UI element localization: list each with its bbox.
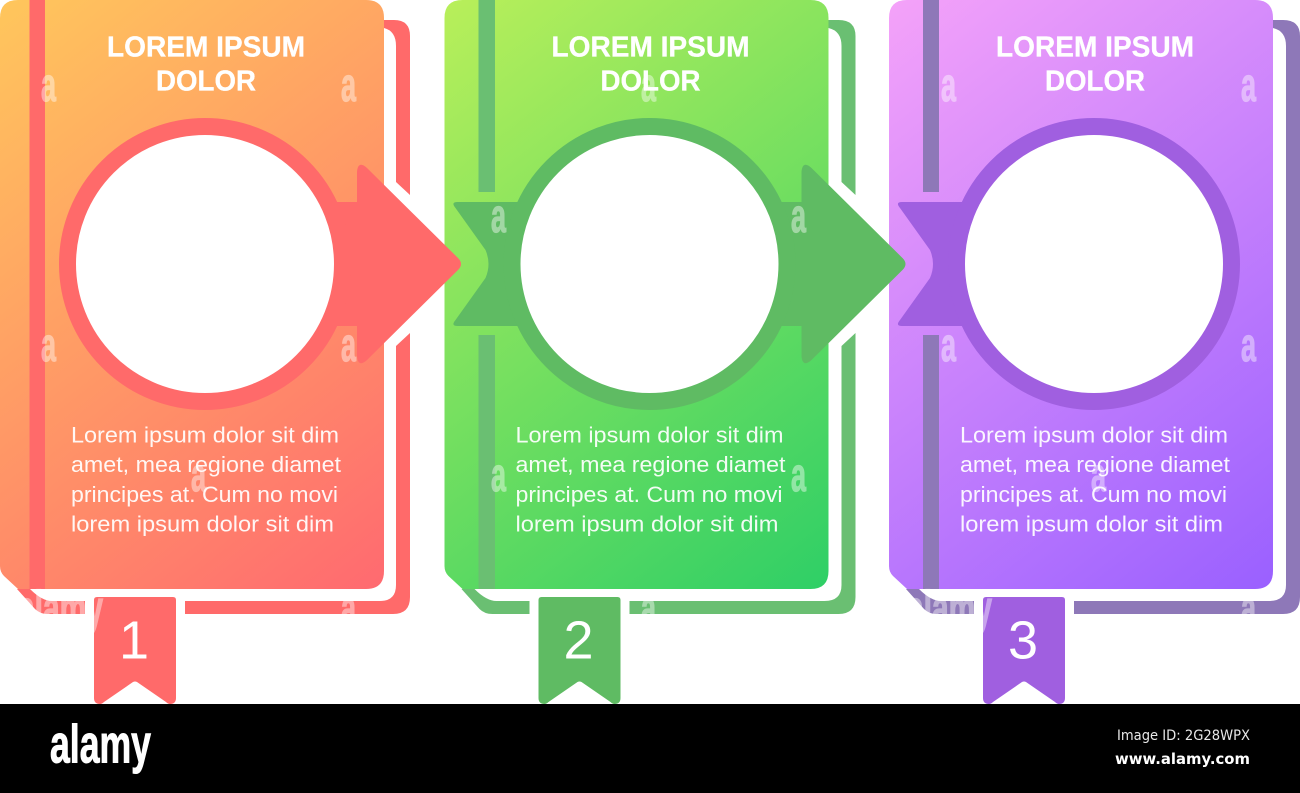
stock watermark marks: a bbox=[641, 58, 656, 111]
step body text: lorem ipsum dolor sit dim bbox=[71, 512, 334, 536]
step body text bbox=[71, 422, 341, 536]
step body text: principes at. Cum no movi bbox=[960, 482, 1227, 507]
stock watermark marks: a bbox=[1241, 58, 1256, 111]
left arrow notch bbox=[453, 202, 544, 326]
stock watermark marks: a bbox=[191, 448, 206, 501]
stock watermark marks: a bbox=[1091, 448, 1106, 501]
step body text: amet, mea regione diamet bbox=[960, 452, 1230, 477]
step body text: lorem ipsum dolor sit dim bbox=[516, 512, 778, 536]
stock watermark marks: alamy bbox=[18, 581, 103, 634]
step body text: amet, mea regione diamet bbox=[71, 452, 341, 477]
step body text bbox=[516, 422, 786, 536]
spine stripe bbox=[923, 0, 939, 589]
step body text: Lorem ipsum dolor sit dim bbox=[960, 422, 1228, 448]
left arrow notch bbox=[898, 202, 989, 326]
stock watermark marks: a bbox=[641, 581, 656, 634]
placeholder ring bbox=[68, 126, 342, 402]
bookmark number 2 bbox=[538, 597, 620, 704]
step heading: DOLOR bbox=[600, 66, 701, 98]
footer band bbox=[0, 704, 1300, 793]
stock watermark marks: a bbox=[41, 318, 56, 371]
stock watermark marks: a bbox=[791, 189, 806, 242]
book front cover bbox=[444, 0, 828, 589]
bookmark number 3: 3 bbox=[1008, 610, 1038, 670]
step heading: LOREM IPSUM bbox=[107, 32, 305, 64]
panel: step 1 bbox=[0, 0, 461, 704]
stock watermark marks: a bbox=[341, 318, 356, 371]
book back cover rails bbox=[906, 20, 1300, 614]
stock watermark marks: a bbox=[1241, 318, 1256, 371]
bookmark number 1: 1 bbox=[119, 610, 149, 670]
step heading: DOLOR bbox=[1045, 66, 1145, 98]
panel: step 2 bbox=[444, 0, 906, 704]
arrow out to next step bbox=[150, 165, 461, 363]
bookmark number 2: 2 bbox=[563, 610, 594, 670]
step body text: lorem ipsum dolor sit dim bbox=[960, 512, 1223, 536]
arrow out to next step bbox=[594, 165, 906, 363]
stock watermark marks bbox=[18, 58, 1256, 634]
website: www.alamy.com bbox=[1115, 750, 1250, 768]
placeholder ring bbox=[512, 126, 787, 402]
book back cover rails bbox=[17, 20, 410, 614]
panel: step 3 bbox=[889, 0, 1300, 704]
bookmark number 3 bbox=[983, 597, 1065, 704]
image id: Image ID: 2G28WPX bbox=[1117, 728, 1250, 744]
step body text: Lorem ipsum dolor sit dim bbox=[71, 422, 339, 448]
step heading: LOREM IPSUM bbox=[996, 32, 1194, 64]
step body text: Lorem ipsum dolor sit dim bbox=[516, 422, 784, 448]
spine stripe bbox=[30, 0, 45, 589]
stock watermark marks: a bbox=[341, 58, 356, 111]
stock watermark marks: a bbox=[341, 581, 356, 634]
spine stripe bbox=[478, 0, 495, 589]
placeholder ring bbox=[956, 126, 1232, 402]
step heading bbox=[996, 32, 1194, 98]
step heading: DOLOR bbox=[156, 66, 256, 98]
step heading: LOREM IPSUM bbox=[552, 32, 750, 64]
stock watermark marks: alamy bbox=[907, 581, 992, 634]
stock watermark marks: a bbox=[1241, 581, 1256, 634]
alamy logo: alamy bbox=[50, 714, 151, 774]
step body text: principes at. Cum no movi bbox=[71, 482, 338, 507]
book front cover bbox=[0, 0, 384, 589]
step heading bbox=[107, 32, 305, 98]
stock watermark marks: a bbox=[791, 448, 806, 501]
step heading bbox=[552, 32, 750, 98]
book back cover rails bbox=[462, 20, 856, 614]
book front cover bbox=[889, 0, 1273, 589]
stock watermark marks: a bbox=[491, 448, 506, 501]
stock watermark marks: a bbox=[941, 58, 956, 111]
stock watermark marks: a bbox=[41, 58, 56, 111]
bookmark number 1 bbox=[94, 597, 176, 704]
step body text bbox=[960, 422, 1230, 536]
step body text: amet, mea regione diamet bbox=[516, 452, 786, 477]
stock watermark marks: a bbox=[491, 189, 506, 242]
step body text: principes at. Cum no movi bbox=[516, 482, 782, 507]
stock watermark marks: a bbox=[941, 318, 956, 371]
